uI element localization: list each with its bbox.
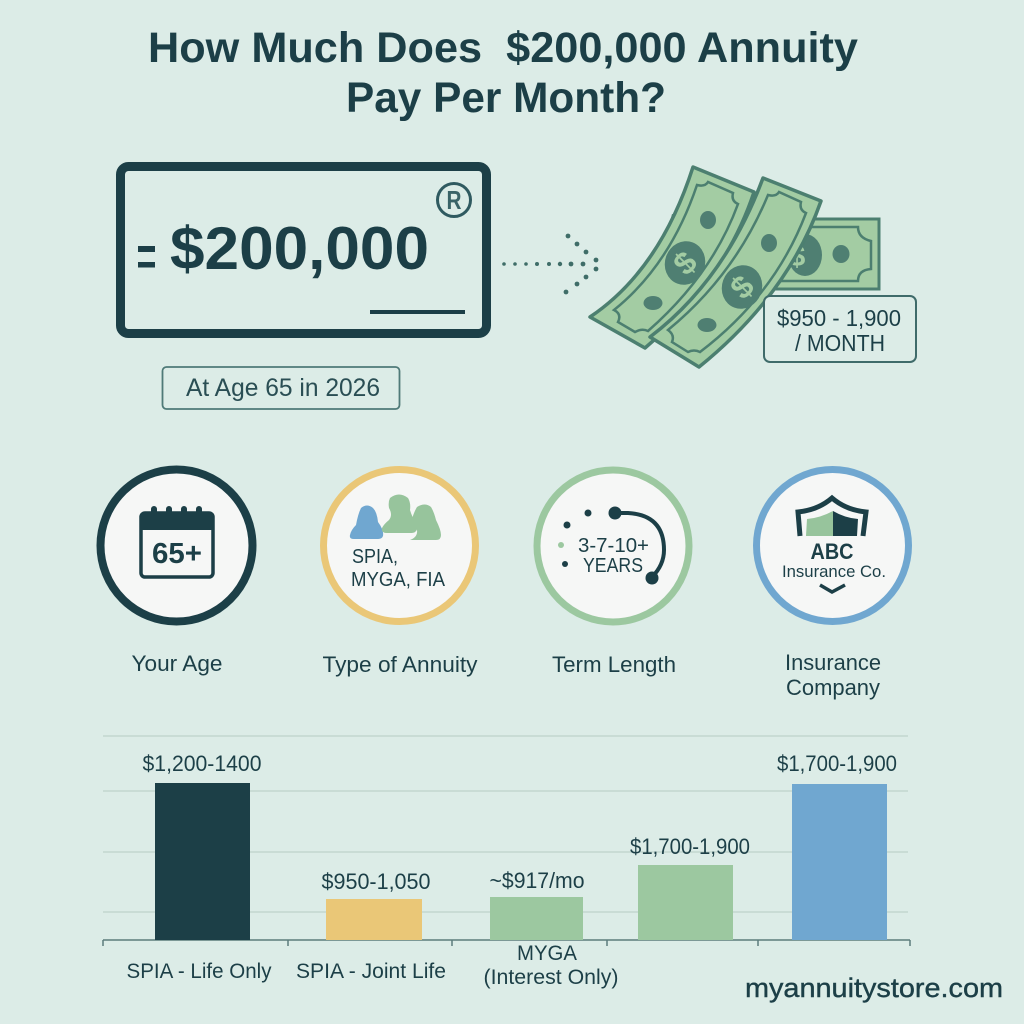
panel: principal amount box — [120, 166, 486, 334]
bar: unlabelled blue — [777, 751, 897, 940]
label: insurance company — [785, 650, 881, 700]
panel: term length: YEARS — [583, 555, 643, 577]
label: term length: Term Length — [552, 652, 676, 677]
icon: calendar — [140, 506, 214, 577]
bar: unlabelled green — [630, 834, 750, 940]
panel: type of annuity: SPIA, — [352, 546, 398, 568]
callout: monthly range: / MONTH — [795, 330, 885, 356]
registered mark — [438, 184, 470, 216]
label: your age: Your Age — [132, 651, 222, 676]
right bill — [650, 178, 821, 367]
left bill: $ — [666, 244, 704, 282]
panel: insurance company: ABC — [810, 539, 854, 564]
bar: SPIA life only: $1,200-1400 — [142, 751, 262, 776]
title: Pay Per Month? — [346, 74, 666, 122]
flat bill — [745, 219, 879, 289]
principal amount: $200,000 — [170, 215, 429, 282]
bar: SPIA joint life — [296, 869, 446, 983]
bar: unlabelled green: $1,700-1,900 — [630, 834, 750, 859]
panel: your age — [100, 470, 252, 622]
website: myannuitystore.com — [745, 973, 1003, 1003]
panel: type of annuity — [324, 470, 476, 622]
icon: chevron — [820, 585, 845, 592]
panel: insurance company — [756, 470, 908, 622]
bar: SPIA life only — [126, 751, 272, 983]
label: insurance company: Insurance — [785, 650, 881, 675]
signature line — [370, 310, 465, 314]
panel: type of annuity: MYGA, FIA — [351, 569, 446, 591]
panel: term length — [537, 470, 689, 622]
registered mark: R — [446, 185, 462, 215]
icon: timeline arc — [558, 506, 664, 584]
panel: insurance company: Insurance Co. — [782, 563, 886, 581]
bar: unlabelled blue: $1,700-1,900 — [777, 751, 897, 776]
bar: SPIA life only: SPIA - Life Only — [126, 960, 272, 983]
equals mark — [138, 246, 155, 268]
bar: MYGA interest only: ~$917/mo — [490, 868, 584, 893]
panel: term length: 3-7-10+ — [578, 535, 649, 557]
callout: monthly range: $950 - 1,900 — [777, 305, 901, 331]
bar: SPIA joint life: $950-1,050 — [322, 869, 430, 894]
shadow bill — [650, 214, 720, 320]
bar chart — [103, 736, 910, 989]
icon: money bills — [590, 167, 879, 367]
bar: MYGA interest only: MYGA — [517, 942, 577, 965]
bar: SPIA joint life: SPIA - Joint Life — [296, 960, 446, 983]
age label: At Age 65 in 2026 — [186, 374, 380, 402]
arrow: dotted — [502, 234, 598, 294]
icon: shield — [798, 498, 866, 536]
left bill — [590, 167, 754, 348]
bar: MYGA interest only: (Interest Only) — [484, 966, 618, 989]
callout: monthly range — [764, 296, 916, 362]
age label — [162, 367, 400, 409]
bar: MYGA interest only — [484, 868, 618, 989]
flat bill: $ — [789, 240, 806, 273]
icon: three hills — [350, 494, 441, 540]
title: How Much Does $200,000 Annuity — [148, 24, 858, 72]
label: insurance company: Company — [786, 675, 880, 700]
icon: calendar: 65+ — [152, 538, 202, 570]
label: type of annuity: Type of Annuity — [322, 652, 478, 677]
right bill: $ — [723, 268, 761, 306]
title — [148, 24, 858, 122]
